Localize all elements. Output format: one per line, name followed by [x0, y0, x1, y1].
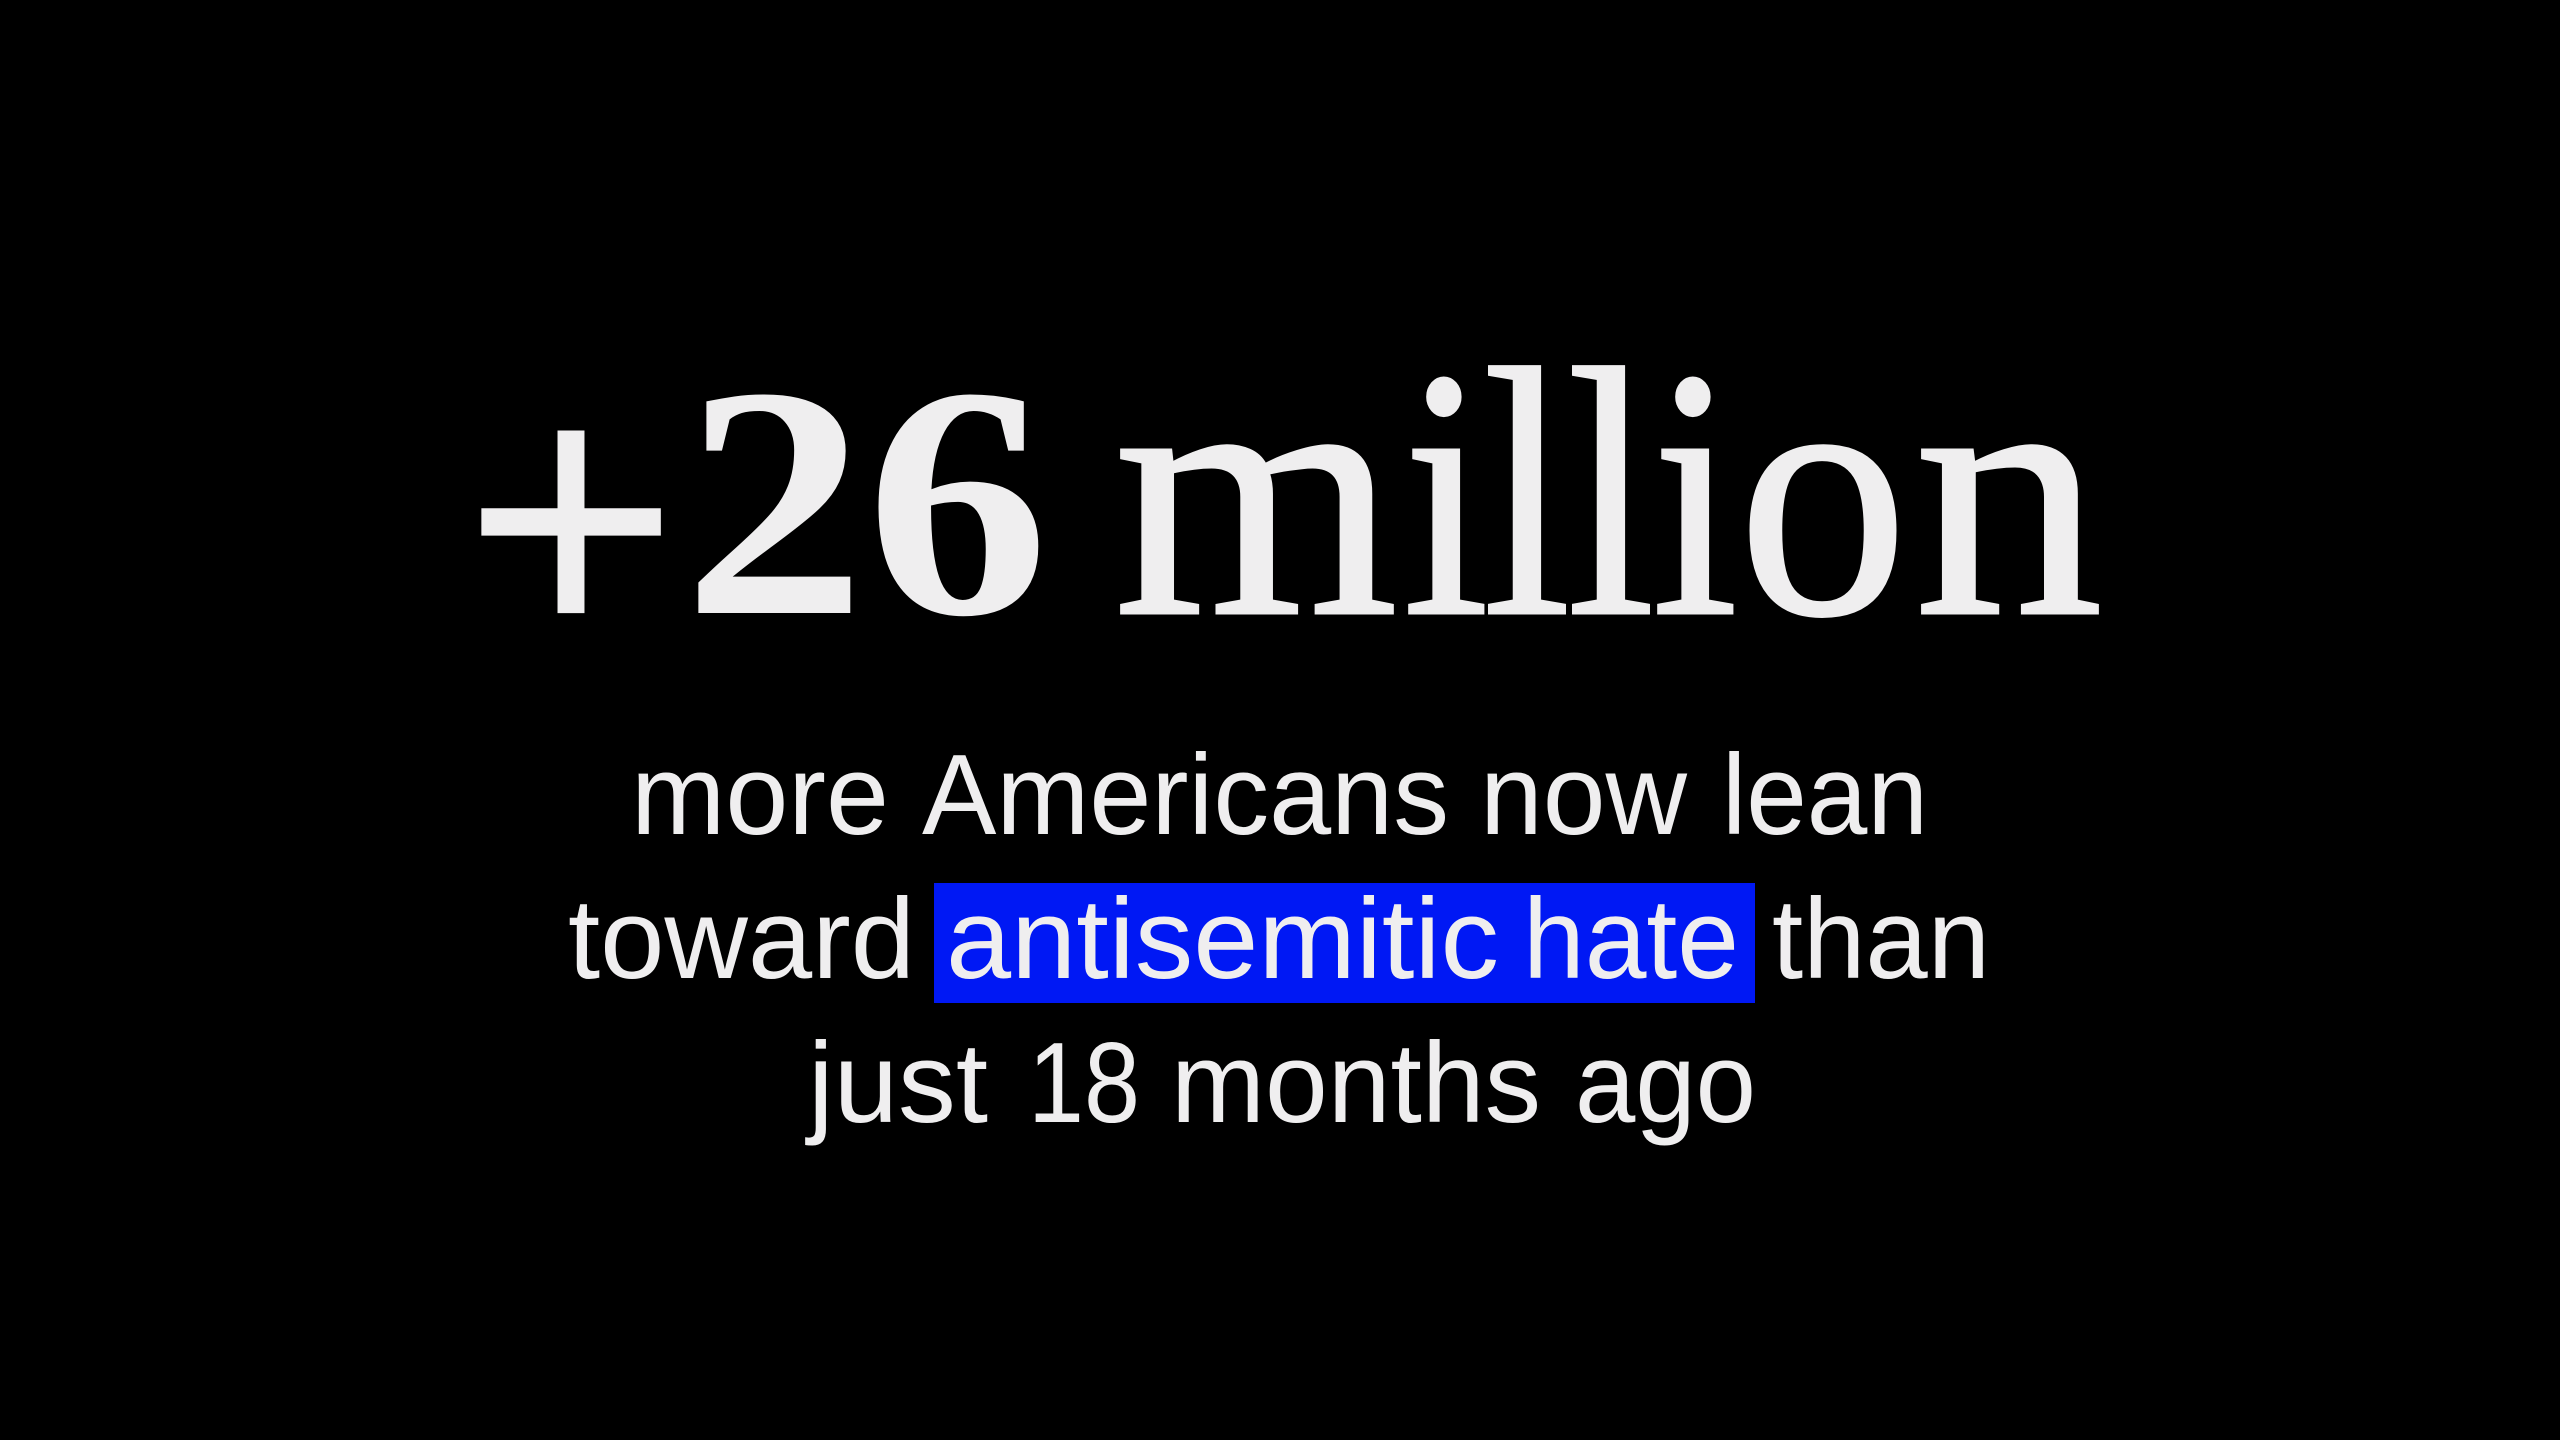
line 2 start: toward — [568, 876, 915, 1003]
headline word: n — [1914, 297, 2103, 690]
headline number: + — [461, 303, 681, 737]
highlight: antisemitic hate: antisemitic — [946, 876, 1499, 1003]
line 3: 18 — [1028, 1020, 1140, 1147]
line 1: more — [631, 732, 889, 859]
headline word: i — [1652, 297, 1738, 690]
headline number: 26 — [683, 320, 1049, 685]
headline word: i — [1403, 297, 1489, 690]
headline word: o — [1738, 297, 1908, 690]
headline word: l — [1567, 297, 1655, 690]
headline word: l — [1483, 297, 1571, 690]
body statement — [568, 732, 1990, 1147]
line 3: months — [1171, 1020, 1541, 1147]
line 3: just — [805, 1020, 988, 1147]
line 1: now — [1480, 732, 1688, 859]
highlight: antisemitic hate: hate — [1523, 876, 1739, 1003]
headline: +26 million — [461, 297, 2103, 737]
line 1: Americans — [922, 732, 1449, 859]
headline word: m — [1114, 297, 1398, 690]
line 2 end: than — [1772, 876, 1990, 1003]
line 3: ago — [1575, 1020, 1756, 1147]
line 1: lean — [1722, 732, 1928, 859]
highlight: antisemitic hate — [934, 876, 1755, 1003]
